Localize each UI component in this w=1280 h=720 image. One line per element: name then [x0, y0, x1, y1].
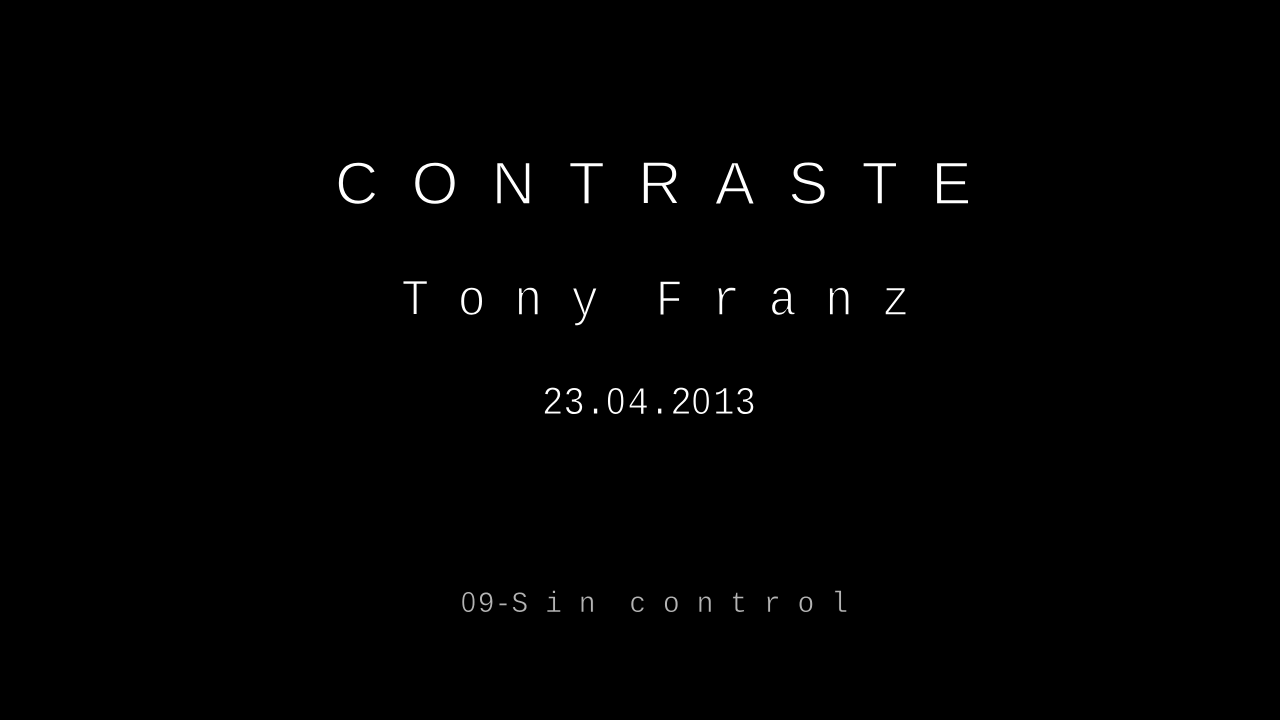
artist name: Tony Franz [401, 272, 939, 330]
date: 23.04.2013 [542, 381, 756, 427]
title: CONTRASTE [335, 150, 1005, 217]
track label: 09-Sin control [461, 586, 864, 622]
